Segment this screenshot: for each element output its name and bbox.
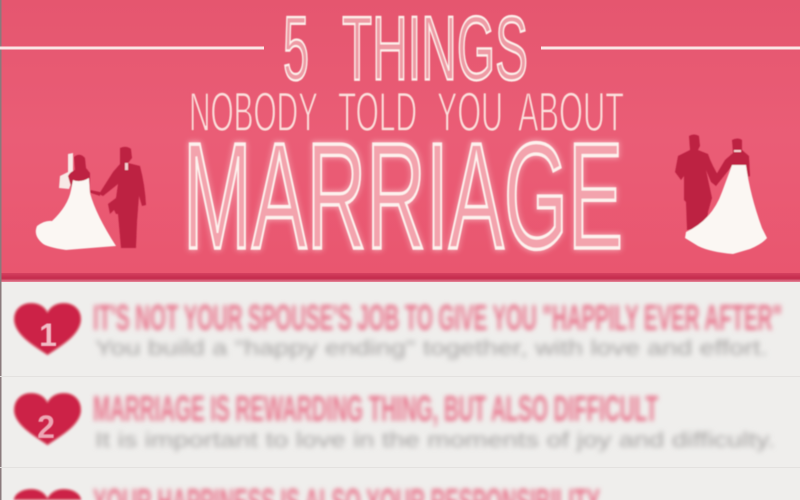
bride neck [734, 150, 741, 152]
bride veil [59, 153, 73, 189]
divider lines [0, 376, 800, 468]
panel: list background [0, 280, 800, 500]
heading: 5 THINGS: THINGS [342, 0, 528, 100]
left edge line [0, 0, 2, 500]
bride upper body [68, 155, 100, 196]
heading: NOBODY TOLD YOU ABOUT: TOLD [338, 80, 417, 143]
groom back [675, 134, 720, 230]
bride dress [685, 165, 767, 254]
heading: NOBODY TOLD YOU ABOUT [189, 80, 624, 143]
heading: 5 THINGS: 5 [283, 0, 309, 100]
title rule: left [0, 46, 264, 50]
item 2 body: It is important to love in the moments of joy and difficulty. [95, 429, 775, 452]
icon: heart 2: 2 [37, 409, 55, 445]
icon: heart 1 [14, 303, 81, 355]
list item 3 [12, 486, 602, 500]
bride back [713, 138, 750, 186]
icon: heart 1: 1 [39, 317, 57, 353]
groom [99, 147, 146, 248]
icon: couple right [675, 134, 767, 254]
bride dress [36, 178, 116, 250]
icon: couple left [36, 147, 146, 250]
item 1 body: You build a "happy ending" together, with love and effort. [95, 337, 768, 360]
heading: NOBODY TOLD YOU ABOUT: ABOUT [518, 80, 624, 143]
heading: NOBODY TOLD YOU ABOUT: NOBODY [189, 80, 318, 143]
icon: heart 2 [14, 393, 81, 445]
title rule: right [541, 46, 800, 50]
panel: header background [0, 0, 800, 274]
icon: heart 3 [14, 489, 81, 500]
header bottom band [0, 273, 800, 282]
heading: 5 THINGS [283, 0, 528, 100]
list item 2 [14, 388, 775, 452]
groom shirt [125, 163, 128, 170]
heading: NOBODY TOLD YOU ABOUT: YOU [437, 80, 503, 143]
list item 1 [14, 297, 782, 360]
